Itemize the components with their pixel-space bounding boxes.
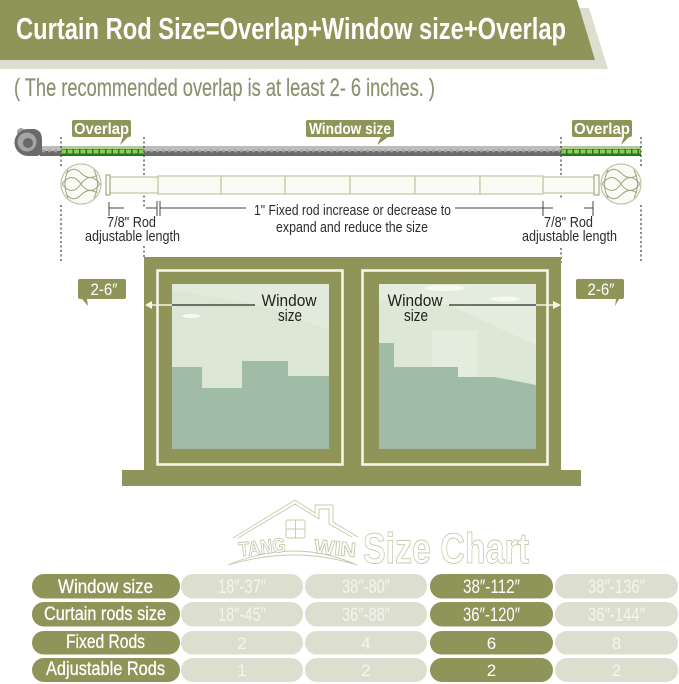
- row: fixed rods: 6: [487, 634, 496, 653]
- curtain rod: [61, 164, 641, 204]
- row: curtain rods size: 36″-88″: [342, 605, 390, 626]
- row: curtain rods size: 36″-144″: [588, 605, 645, 626]
- right glass: [379, 284, 536, 449]
- row: fixed rods: 8: [612, 634, 621, 653]
- text: window size right: size: [404, 306, 428, 325]
- row: adjustable rods: 2: [612, 661, 621, 680]
- text: window size right: [388, 291, 443, 325]
- finial: left: [61, 164, 101, 204]
- row: adjustable rods: [32, 658, 678, 682]
- note: fixed rod: expand and reduce the size: [276, 219, 428, 236]
- arrow: right: [449, 301, 561, 309]
- text: window size left: Window: [262, 291, 317, 310]
- note: left adjustable: [85, 214, 180, 245]
- note: left adjustable: 7/8" Rod: [107, 214, 156, 231]
- label: left overlap: [72, 120, 131, 145]
- text: window size right: Window: [388, 291, 443, 310]
- row: adjustable rods: 1: [237, 661, 247, 680]
- arrow: left: [145, 301, 255, 309]
- row: curtain rods size: 18″-45″: [218, 605, 266, 626]
- note: right adjustable: [522, 214, 617, 245]
- row: window size: Window size: [58, 577, 153, 598]
- row: window size: [32, 574, 678, 598]
- logo and size chart heading: [228, 500, 529, 573]
- note: fixed rod: 1" Fixed rod increase or decrease to: [254, 202, 451, 219]
- row: fixed rods: 2: [237, 634, 247, 653]
- window illustration: [122, 257, 581, 486]
- label: window size: [306, 120, 394, 145]
- dimension lines: [109, 201, 593, 216]
- row: window size: 18″-37″: [218, 577, 266, 598]
- row: curtain rods size: [32, 602, 678, 626]
- size table: [32, 574, 678, 682]
- label: window size: Window size: [309, 121, 391, 138]
- logo text: WIN: [313, 536, 357, 562]
- row: fixed rods: Fixed Rods: [66, 632, 145, 653]
- label: left overlap: Overlap: [74, 121, 129, 138]
- row: adjustable rods: Adjustable Rods: [46, 659, 165, 680]
- note: left adjustable: adjustable length: [85, 228, 180, 245]
- logo house: [228, 500, 358, 565]
- size chart title: Size Chart: [363, 525, 529, 573]
- row: adjustable rods: 2: [361, 661, 371, 680]
- row: window size: 38″-80″: [342, 577, 390, 598]
- text: window size left: size: [278, 306, 302, 325]
- logo text: TANG: [238, 535, 287, 561]
- note: fixed rod: [254, 202, 451, 236]
- note: right adjustable: 7/8" Rod: [544, 214, 593, 231]
- note: right adjustable: adjustable length: [522, 228, 617, 245]
- label: right overlap: [572, 120, 632, 145]
- measuring tape: [14, 128, 641, 156]
- row: fixed rods: [32, 631, 678, 654]
- callout: left 2-6: 2-6″: [90, 280, 118, 299]
- finial: right: [601, 164, 641, 204]
- callout: right 2-6: [576, 279, 624, 306]
- subtitle: ( The recommended overlap is at least 2- 6 inches. ): [14, 74, 435, 102]
- row: fixed rods: 4: [361, 634, 371, 653]
- left glass: [172, 284, 329, 449]
- row: window size: 38″-112″: [463, 577, 520, 598]
- header banner: [0, 0, 608, 69]
- label: right overlap: Overlap: [574, 121, 630, 138]
- callout: right 2-6: 2-6″: [588, 280, 614, 299]
- dotted guide lines: [61, 137, 641, 263]
- text: window size left: [262, 291, 317, 325]
- row: curtain rods size: 36″-120″: [463, 605, 520, 626]
- callout: left 2-6: [78, 279, 126, 306]
- row: adjustable rods: 2: [487, 661, 496, 680]
- logo text: [238, 535, 357, 562]
- row: curtain rods size: Curtain rods size: [44, 604, 166, 625]
- row: window size: 38″-136″: [588, 577, 645, 598]
